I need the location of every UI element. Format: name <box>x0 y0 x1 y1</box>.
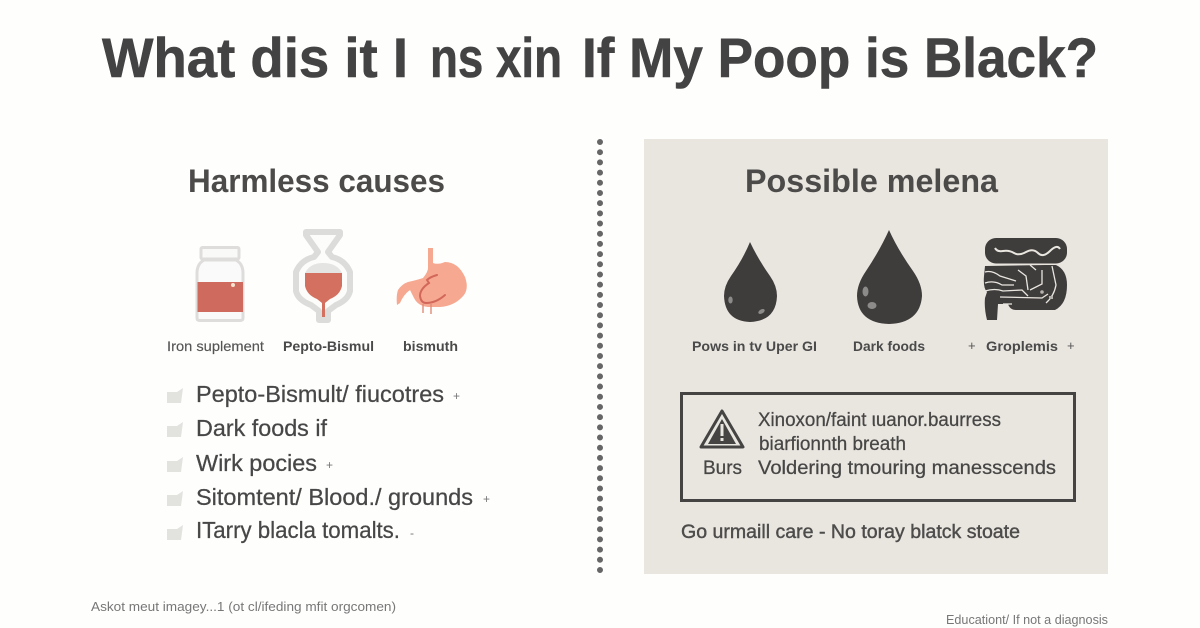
icon: large dark drop <box>857 230 922 324</box>
label: iron supplement: Iron suplement <box>167 338 264 354</box>
label: Dark foods: Dark foods <box>853 338 925 354</box>
panel: harmless causes <box>167 163 490 543</box>
list item 3: Wirk pocies <box>196 450 317 476</box>
panel: possible melena content <box>681 163 1075 543</box>
warning text: biarfionnth breath <box>759 434 906 455</box>
warning text: Xinoxon/faint ιuanor.baurress <box>758 410 1001 431</box>
footer note right: Educationt/ If not a diagnosis <box>946 612 1108 627</box>
dotted divider <box>597 142 603 570</box>
care instruction: Go urmaill care - No toray blatck stoate <box>681 522 1020 543</box>
title: ns xin <box>430 26 562 89</box>
warning text: Burs <box>703 458 742 479</box>
list item 5: - <box>410 526 414 540</box>
label: Groplemis: + <box>1067 338 1075 353</box>
list item 5: ITarry blacla tomalts. <box>196 517 400 543</box>
label: Groplemis: + <box>968 338 976 353</box>
list item 4: + <box>483 492 490 506</box>
label: Pows in tv Uper GI: Pows in tv Uper GI <box>692 338 817 354</box>
title: What dis it I <box>102 26 408 89</box>
title: If My Poop is Black? <box>582 26 1098 89</box>
warning text: Voldering tmouring manesscends <box>758 458 1056 479</box>
list item 4: Sitomtent/ Blood./ grounds <box>196 484 473 510</box>
icon: stomach <box>397 248 467 314</box>
warning text <box>703 410 1056 479</box>
label: bismuth: bismuth <box>403 338 458 354</box>
label: Groplemis: Groplemis <box>986 338 1058 354</box>
list item 1: + <box>453 389 460 403</box>
title <box>102 26 1098 89</box>
list item 1: Pepto-Bismult/ fiucotres <box>196 381 444 407</box>
icon: intestines <box>984 238 1067 320</box>
icon: Pepto-Bismol flask <box>296 232 350 320</box>
label: Pepto-Bismul: Pepto-Bismul <box>283 338 374 354</box>
icon: iron supplement jar <box>197 248 243 320</box>
callout: warning box <box>682 394 1074 500</box>
panel: possible melena background <box>644 139 1108 574</box>
icon: small dark drop <box>724 242 777 322</box>
icon: warning triangle <box>701 411 743 447</box>
footer note left: Askot meut imagey...1 (ot cl/ifeding mfit orgcomen) <box>91 599 396 614</box>
list: harmless causes <box>167 381 490 543</box>
heading: possible melena: Possible melena <box>745 163 998 199</box>
list item 3: + <box>326 458 333 472</box>
list item 2: Dark foods if <box>196 415 328 441</box>
label: Groplemis <box>968 338 1075 354</box>
heading: harmless causes: Harmless causes <box>188 163 445 199</box>
